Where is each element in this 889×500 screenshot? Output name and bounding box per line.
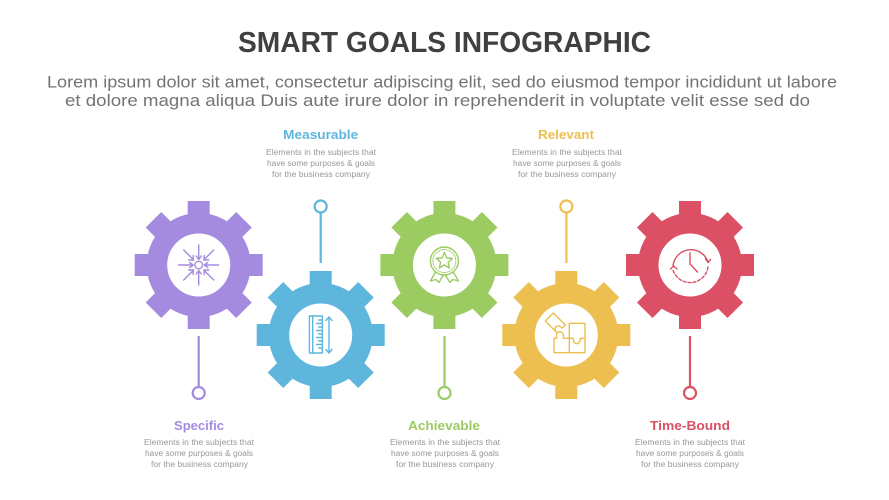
gear: Relevant [502, 271, 630, 399]
gear: Specific [135, 201, 263, 329]
description: Measurable: Elements in the subjects that [266, 147, 377, 157]
gear: Measurable [257, 271, 385, 399]
icon: clock with cycle arrows [670, 250, 710, 283]
icon: puzzle pieces [545, 313, 585, 353]
connector: Measurable [315, 200, 327, 263]
icon: ruler with height arrow [309, 316, 332, 353]
description: Specific: for the business company [151, 459, 249, 469]
step: Time-Bound [626, 201, 754, 469]
step: Relevant [502, 127, 630, 399]
subtitle [47, 72, 837, 110]
description: Time-Bound: have some purposes & goals [636, 448, 744, 458]
connector: Achievable [438, 336, 450, 399]
description: Specific: Elements in the subjects that [144, 437, 255, 447]
connector: Time-Bound [684, 336, 696, 399]
label: Achievable: Achievable [408, 418, 480, 433]
label: Relevant: Relevant [538, 127, 595, 142]
label: Time-Bound: Time-Bound [650, 418, 730, 433]
icon: converging arrows [179, 245, 219, 285]
subtitle: Lorem ipsum dolor sit amet, consectetur adipiscing elit, sed do eiusmod tempor incididunt ut labore [47, 72, 837, 92]
gear: Time-Bound [626, 201, 754, 329]
description: Relevant: for the business company [518, 169, 617, 179]
step: Measurable [257, 127, 385, 399]
label: Specific: Specific [174, 418, 224, 433]
description: Specific: have some purposes & goals [145, 448, 253, 458]
description: Relevant: have some purposes & goals [513, 158, 621, 168]
title: SMART GOALS INFOGRAPHIC [238, 27, 651, 59]
description: Measurable: for the business company [272, 169, 371, 179]
description: Achievable: Elements in the subjects that [390, 437, 501, 447]
step: Specific [135, 201, 263, 469]
connector: Specific [193, 336, 205, 399]
description: Time-Bound: for the business company [641, 459, 740, 469]
label: Measurable: Measurable [283, 127, 358, 142]
subtitle: et dolore magna aliqua Duis aute irure dolor in reprehenderit in voluptate velit esse sed do [65, 91, 810, 110]
description: Measurable: have some purposes & goals [267, 158, 375, 168]
gear: Achievable [380, 201, 508, 329]
description: Relevant: Elements in the subjects that [512, 147, 623, 157]
description: Achievable: have some purposes & goals [391, 448, 499, 458]
description: Achievable: for the business company [396, 459, 495, 469]
icon: award badge [430, 247, 458, 282]
step: Achievable [380, 201, 508, 469]
description: Time-Bound: Elements in the subjects that [635, 437, 746, 447]
connector: Relevant [560, 200, 572, 263]
